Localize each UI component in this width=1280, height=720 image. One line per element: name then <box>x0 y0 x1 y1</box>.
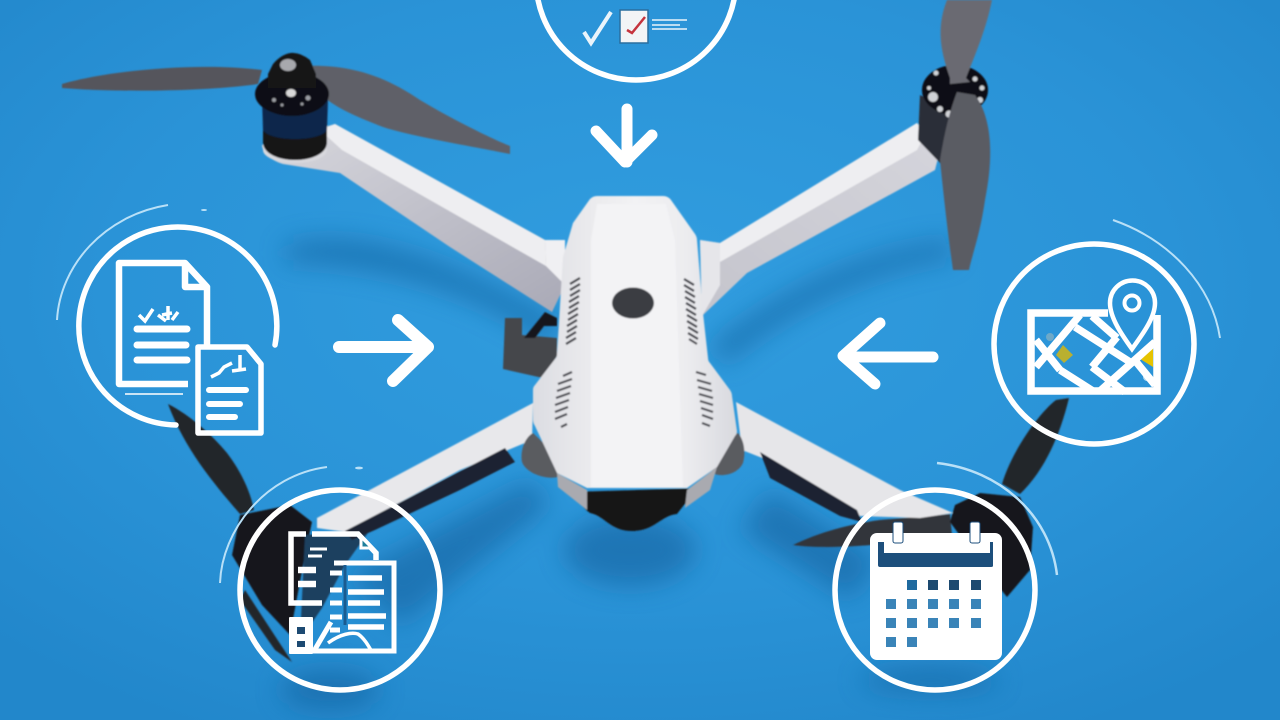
propeller: front left lower <box>240 590 292 662</box>
top sensor <box>612 288 654 318</box>
arm: back left <box>262 124 565 312</box>
map roads <box>1031 313 1157 392</box>
icon: front document <box>314 563 394 652</box>
orbit arc <box>57 205 168 320</box>
arrow: down <box>596 109 652 162</box>
motor: back right <box>918 65 988 165</box>
ring <box>835 490 1035 690</box>
drone shadow <box>280 239 1000 710</box>
lower body underside right <box>685 467 717 508</box>
motor: front right <box>950 493 1033 597</box>
shadow under front left arm <box>300 530 370 640</box>
nose camera <box>570 488 704 531</box>
icon: checkmark <box>584 12 611 43</box>
ring <box>79 227 277 425</box>
orbit arc <box>937 463 1057 575</box>
icon: location pin <box>1110 280 1155 349</box>
lower body underside <box>557 473 587 510</box>
vents: upper right <box>684 279 698 344</box>
step: checklist (top) <box>536 0 736 80</box>
arm: front right <box>736 402 953 522</box>
icon: checked box <box>620 10 648 43</box>
vents: upper left <box>566 278 580 344</box>
orbit arc <box>1113 220 1220 338</box>
motor: back left <box>255 53 329 163</box>
propeller: back left <box>62 66 510 154</box>
icon: map <box>1031 313 1157 392</box>
propeller: front right <box>1002 398 1069 494</box>
icon: back document <box>291 534 376 603</box>
front sensor pods <box>521 433 744 478</box>
step: report (bottom left) <box>220 467 440 690</box>
step: documents (left) <box>57 205 277 433</box>
ring <box>240 490 440 690</box>
drone <box>62 0 1069 662</box>
propeller: front left <box>168 404 254 514</box>
propeller: back right up <box>941 0 992 84</box>
arrow: right <box>339 320 428 381</box>
step: calendar (bottom right) <box>835 463 1057 690</box>
body <box>533 196 737 488</box>
icon: small document <box>198 347 261 433</box>
ring <box>994 244 1194 444</box>
map colour patches <box>1137 342 1153 367</box>
propeller: front right lower <box>793 514 952 547</box>
icon: small boxes <box>289 617 313 654</box>
icon: calendar <box>870 522 1002 660</box>
arrow: left <box>843 323 933 384</box>
vents: lower left <box>555 372 572 427</box>
vents: lower right <box>696 372 713 426</box>
icon: main document <box>119 263 207 394</box>
ring <box>536 0 736 80</box>
calendar day grid <box>886 580 981 647</box>
propeller: back right down <box>940 92 990 270</box>
orbit arc <box>220 467 327 583</box>
step: map (right) <box>994 220 1220 444</box>
gimbal camera <box>503 312 557 378</box>
icon: text lines <box>652 20 687 29</box>
arm: back right <box>700 123 940 316</box>
sparkle <box>201 209 207 211</box>
sparkle <box>355 467 363 469</box>
arm: front left <box>317 403 533 540</box>
motor: front left <box>232 505 312 635</box>
